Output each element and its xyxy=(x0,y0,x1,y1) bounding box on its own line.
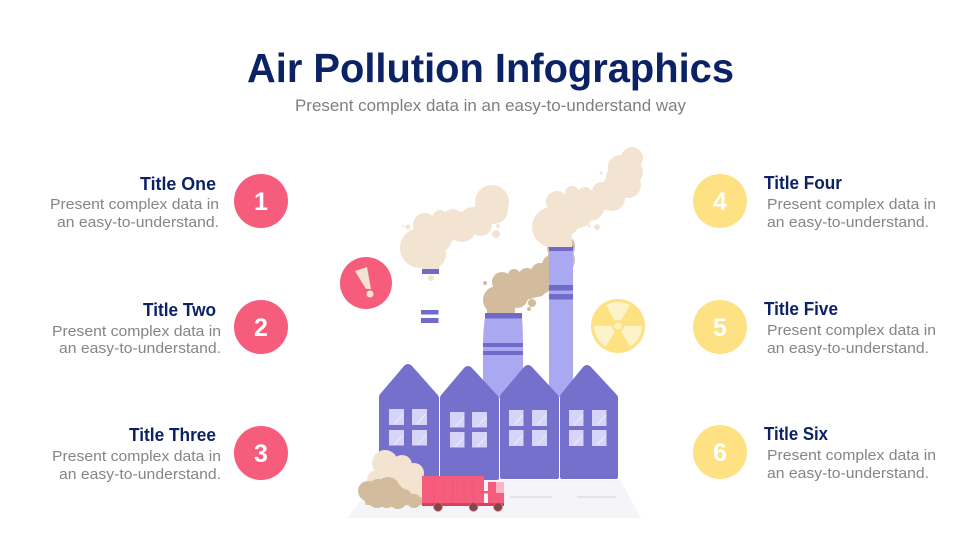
item 3: Title Three xyxy=(52,425,288,483)
smoke: left plume xyxy=(400,185,509,281)
item 4: Title Four: Present complex data in xyxy=(767,196,936,213)
broken chimney fragments xyxy=(421,269,439,323)
truck xyxy=(422,476,504,511)
item 2: Title Two: Title Two xyxy=(143,300,216,320)
subtitle: Present complex data in an easy-to-understand way xyxy=(295,96,686,115)
building 4 xyxy=(560,365,618,479)
item 4: Title Four: 4 xyxy=(713,188,727,216)
item 3: Title Three: Present complex data in xyxy=(52,448,221,465)
item 5: Title Five: 5 xyxy=(713,314,727,342)
item 4: Title Four: Title Four xyxy=(764,173,842,193)
item 1: Title One: an easy-to-understand. xyxy=(57,214,219,231)
item 6: Title Six: 6 xyxy=(713,439,727,467)
factory buildings xyxy=(379,364,618,480)
item 1: Title One: Title One xyxy=(140,174,216,194)
item 2: Title Two: 2 xyxy=(254,314,268,342)
item 1: Title One xyxy=(50,174,288,231)
smoke: dark plume xyxy=(483,233,575,314)
dust cloud xyxy=(358,450,424,509)
road xyxy=(347,480,641,518)
item 6: Title Six: Title Six xyxy=(764,424,828,444)
item 5: Title Five: Present complex data in xyxy=(767,322,936,339)
icon: alert xyxy=(340,257,392,309)
item 6: Title Six xyxy=(693,424,936,482)
windows xyxy=(389,409,606,448)
item 6: Title Six: an easy-to-understand. xyxy=(767,465,929,482)
item 6: Title Six: Present complex data in xyxy=(767,447,936,464)
item 5: Title Five xyxy=(693,299,936,357)
smoke: right plume xyxy=(532,147,643,247)
item 3: Title Three: Title Three xyxy=(129,425,216,445)
item 4: Title Four xyxy=(693,173,936,231)
item 2: Title Two: Present complex data in xyxy=(52,323,221,340)
item 5: Title Five: an easy-to-understand. xyxy=(767,340,929,357)
building 1 xyxy=(379,364,439,478)
title: Air Pollution Infographics xyxy=(247,45,734,91)
building 3 xyxy=(500,365,559,479)
item 2: Title Two xyxy=(52,300,288,357)
item 3: Title Three: 3 xyxy=(254,440,268,468)
item 4: Title Four: an easy-to-understand. xyxy=(767,214,929,231)
item 2: Title Two: an easy-to-understand. xyxy=(59,340,221,357)
item 5: Title Five: Title Five xyxy=(764,299,838,319)
icon: radiation xyxy=(591,299,645,353)
chimney: tall xyxy=(549,246,573,397)
item 1: Title One: 1 xyxy=(254,188,268,216)
chimney: short xyxy=(483,313,523,398)
building 2 xyxy=(440,366,499,480)
item 3: Title Three: an easy-to-understand. xyxy=(59,466,221,483)
item 1: Title One: Present complex data in xyxy=(50,196,219,213)
